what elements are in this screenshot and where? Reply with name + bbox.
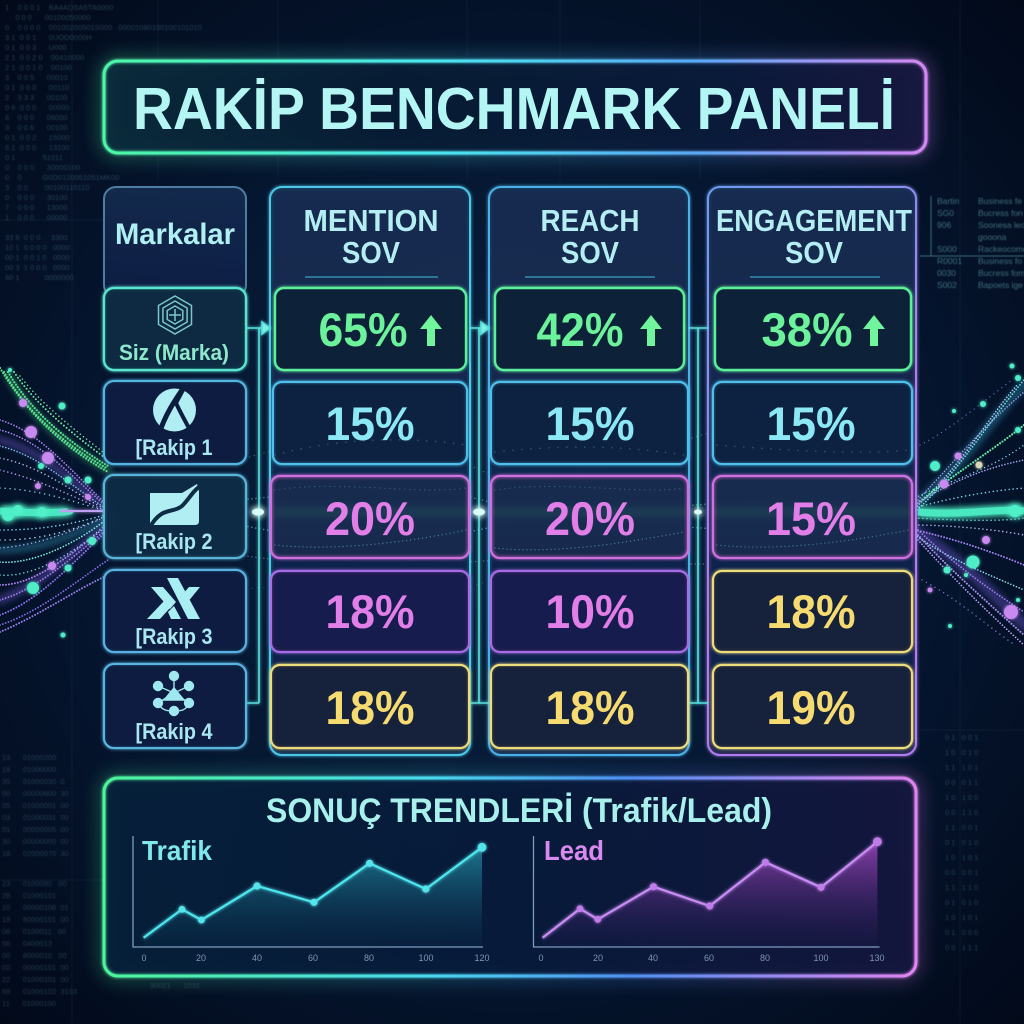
binary data: bottom right: 1 0 1 0 1 <box>945 913 978 922</box>
binary data: top left: 0 0 0 0 30000100 <box>5 163 80 172</box>
cell: engagement rakip 1 <box>713 382 912 464</box>
chart: lead: 20 <box>593 953 603 963</box>
binary data: top left: 0 0 G0D0120051051MK00 <box>5 173 119 182</box>
heading: engagement <box>716 203 912 270</box>
arrow up <box>863 315 885 346</box>
row 3 particle band <box>271 507 912 517</box>
binary data: bottom left: 19 80000101 00 <box>2 915 69 924</box>
icon: network <box>154 672 194 716</box>
binary data: top left: 1 0 0 0 1 BA4ADSA5TA0000 <box>5 3 113 12</box>
binary data: bottom right <box>945 733 978 952</box>
binary data: top left: 0 0 0 0 30100 <box>5 193 68 202</box>
chart: lead: 40 <box>648 953 658 963</box>
binary data: bottom right: 0 0 0 0 1 <box>945 868 978 877</box>
chart: lead: 60 <box>704 953 714 963</box>
cell: mention siz 65%: 65% <box>318 303 408 356</box>
chart: lead: 100 <box>813 953 829 963</box>
cell: reach rakip 4 <box>491 665 688 748</box>
side legend text: R0001 <box>937 256 962 266</box>
binary data: bottom left <box>2 753 200 1008</box>
heading: reach: SOV <box>561 235 619 270</box>
binary data: top left: 33 8 0 0 0 3300 <box>5 233 68 242</box>
side legend text: Business fo <box>978 256 1022 266</box>
cell: engagement rakip 3: 18% <box>766 585 856 638</box>
brand row: rakip 2 <box>104 475 246 558</box>
binary data: top left: 7 0 0 0 13000 <box>5 203 68 212</box>
chart: trafik: 20 <box>196 953 206 963</box>
cell: engagement siz 38% <box>715 288 911 370</box>
binary data: top left: 1 0 0 0 00000 <box>5 213 68 222</box>
cell: reach siz 42% <box>495 288 684 370</box>
binary data: top left: 0 1 0 0 2 15000 <box>5 133 70 142</box>
chart: trafik: 100 <box>418 953 434 963</box>
binary data: bottom left: 10 00000106 01 <box>2 903 69 912</box>
side legend text: S002 <box>937 280 957 290</box>
side legend text: 906 <box>937 220 951 230</box>
cell: reach rakip 3 <box>491 571 688 652</box>
particles over table <box>275 440 908 550</box>
trends heading: SONUÇ TRENDLERİ (Trafik/Lead) <box>266 792 772 830</box>
heading: engagement: ENGAGEMENT <box>716 203 912 238</box>
binary data: bottom left: 69 01000102 3103 <box>2 987 77 996</box>
binary data: bottom right: 1 0 1 0 1 <box>945 853 978 862</box>
arrow up <box>420 315 442 346</box>
cell: engagement rakip 4: 19% <box>766 681 856 734</box>
side legend text: S000 <box>937 244 957 254</box>
chart: trafik: 80 <box>364 953 374 963</box>
cell: mention rakip 2: 20% <box>325 492 415 545</box>
binary data: top left <box>5 3 202 282</box>
panel: engagement column <box>708 187 916 755</box>
cell: engagement rakip 3 <box>713 571 912 652</box>
connector glow nodes <box>252 508 702 516</box>
binary data: bottom right: 0 1 0 0 1 <box>945 733 978 742</box>
binary data: bottom left: 56 0400013 <box>2 939 58 948</box>
chart: lead: 80 <box>760 953 770 963</box>
cell: reach rakip 3: 10% <box>546 585 634 638</box>
connector lines <box>246 322 708 703</box>
binary data: top left: 6 0 0 0 06000 <box>5 113 68 122</box>
icon: road circle <box>153 387 196 434</box>
cell: reach rakip 2: 20% <box>545 492 635 545</box>
binary data: top left: 0 0 0 0 0 00100200501S000 00001080100100101010 <box>5 23 202 32</box>
binary data: top left: 2 1 0 0 1 0 00100 <box>5 63 72 72</box>
side legend text: Bapoets ige <box>978 280 1023 290</box>
brand row: rakip 4: [Rakip 4 <box>136 719 213 744</box>
title text: RAKİP BENCHMARK PANELİ <box>133 76 895 142</box>
cell: mention siz 65% <box>275 288 466 370</box>
binary data: bottom left: 35 01000030 0 <box>2 777 65 786</box>
brand row: rakip 2: [Rakip 2 <box>136 529 212 554</box>
cell: engagement rakip 2 <box>713 476 912 558</box>
chart: trafik: 60 <box>308 953 318 963</box>
binary data: top left: 0 6 0 0 0 00000 <box>5 103 70 112</box>
binary data: bottom left: 30 00000050 00 <box>2 837 69 846</box>
binary data: top left: 10 1 0 0 0 0 0000 <box>5 243 70 252</box>
binary data: bottom left: 13 01000200 <box>2 753 60 762</box>
binary data: bottom right: 0 1 0 1 0 <box>945 898 978 907</box>
title panel <box>104 61 926 153</box>
cell: mention rakip 3: 18% <box>326 585 414 638</box>
side legend text: 0030 <box>937 268 956 278</box>
heading: reach <box>540 203 640 270</box>
binary data: top left: 60 1 0000000 <box>5 273 74 282</box>
binary data: top left: 3 0 0 5 00010 <box>5 73 68 82</box>
binary data: bottom right: 1 1 1 0 1 <box>945 763 978 772</box>
panel: reach column <box>489 187 689 755</box>
side legend text: Bucress fom <box>978 268 1024 278</box>
chart: lead <box>534 835 885 963</box>
cell: engagement siz 38%: 38% <box>762 303 852 356</box>
binary data: bottom left: 23 0100080 00 <box>2 879 67 888</box>
heading: mention: SOV <box>342 235 400 270</box>
brand row: siz marka <box>104 288 246 370</box>
binary data: bottom right: 1 0 0 1 0 <box>945 748 978 757</box>
cell: mention rakip 4 <box>271 665 469 748</box>
side legend text: SG0 <box>937 208 954 218</box>
cell: mention rakip 2 <box>271 476 469 558</box>
cell: mention rakip 1: 15% <box>326 397 414 450</box>
particle haze across the table <box>240 424 915 600</box>
cell: reach rakip 1 <box>491 382 688 464</box>
cell: mention rakip 1 <box>273 382 467 464</box>
brand header text: Markalar <box>115 218 235 251</box>
binary data: top left: 0 1 0 0 0 00110 <box>5 83 69 92</box>
binary data: bottom right: 0 1 0 1 0 <box>945 838 978 847</box>
binary data: bottom left: 26 01000101 <box>2 891 60 900</box>
glowing particles <box>0 364 1024 638</box>
binary data: bottom left: 06 0100011 00 <box>2 927 66 936</box>
chart: lead: 130 <box>869 953 885 963</box>
binary data: top left: 00 1 0 0 1 0 0000 <box>5 253 70 262</box>
binary data: bottom left: 22 01000101 00 <box>2 975 69 984</box>
binary data: bottom left: 30021 1031 <box>150 981 200 990</box>
cell: engagement rakip 2: 15% <box>766 492 856 545</box>
particle stream: right <box>915 380 1024 645</box>
cell: mention rakip 3 <box>271 571 469 652</box>
binary data: top left: 3 0 0 00100110110 <box>5 183 89 192</box>
panel: brand header <box>104 187 246 297</box>
binary data: top left: 2 3 3 3 00100 <box>5 93 68 102</box>
brand row: rakip 1 <box>104 381 246 464</box>
brand row: rakip 3 <box>104 570 246 652</box>
binary data: bottom right: 0 1 0 0 0 <box>945 928 978 937</box>
heading: reach: REACH <box>540 203 640 238</box>
binary data: bottom left: 02 00000101 00 <box>2 963 69 972</box>
binary data: top left: 6 1 0 0 0 13100 <box>5 143 70 152</box>
binary data: top left: 0 1 51011 <box>5 153 63 162</box>
side legend text: Business fe <box>978 196 1022 206</box>
binary data: bottom right: 0 0 1 1 1 <box>945 943 978 952</box>
panel: mention column <box>270 187 470 755</box>
chart: trafik: Trafik <box>142 835 212 866</box>
brand row: siz marka: Siz (Marka) <box>119 340 229 365</box>
binary data: bottom left: 18 02000070 30 <box>2 849 69 858</box>
side legend text: gooona <box>978 232 1007 242</box>
binary data: bottom right: 1 1 1 1 0 <box>945 883 978 892</box>
cell: reach rakip 4: 18% <box>546 681 634 734</box>
brand row: rakip 3: [Rakip 3 <box>136 624 212 649</box>
side legend text: Bucress fon <box>978 208 1023 218</box>
binary data: bottom left: 18 01000000 <box>2 765 60 774</box>
binary data: top left: 3 0 0 6 00100 <box>5 123 68 132</box>
chart: trafik: 0 <box>141 953 147 963</box>
icon: double chevron <box>147 578 200 619</box>
arrow up <box>640 315 662 346</box>
binary data: top left: 3 1 0 0 1 0UOD0000H <box>5 33 92 42</box>
binary data: bottom right: 1 0 1 0 0 <box>945 793 978 802</box>
binary data: bottom right: 0 0 0 1 1 <box>945 778 978 787</box>
heading: engagement: SOV <box>785 235 843 270</box>
icon: trend folder <box>150 484 199 527</box>
cell: reach rakip 2 <box>491 476 688 558</box>
panel: trends <box>104 778 916 976</box>
cell: engagement rakip 1: 15% <box>766 397 856 450</box>
icon: hexagon maze <box>158 296 192 334</box>
binary data: bottom right: 1 1 0 0 1 <box>945 823 978 832</box>
cell: reach rakip 1: 15% <box>546 397 634 450</box>
side legend text: Soonesa leo <box>978 220 1024 230</box>
cell: mention rakip 4: 18% <box>326 681 414 734</box>
heading: mention: MENTION <box>304 203 438 238</box>
binary data: bottom left: 00 8000010 00 <box>2 951 67 960</box>
chart: lead: Lead <box>544 835 604 866</box>
binary data: top left: 2 1 0 0 2 0 00410000 <box>5 53 84 62</box>
brand row: rakip 4 <box>104 664 246 748</box>
binary data: bottom left: 00 00000600 30 <box>2 789 69 798</box>
cell: engagement rakip 4 <box>713 665 912 748</box>
side legend text: Bartin <box>937 196 959 206</box>
chart: trafik: 120 <box>474 953 490 963</box>
binary data: bottom left: 11 01000100 <box>2 999 60 1008</box>
brand row: rakip 1: [Rakip 1 <box>136 435 212 460</box>
chart: trafik <box>133 835 490 963</box>
binary data: bottom right: 0 0 1 1 0 <box>945 808 978 817</box>
binary data: top left: 00 3 1 0 0 0 0000 <box>5 263 70 272</box>
binary data: bottom left: 05 01000001 00 <box>2 801 69 810</box>
side legend text <box>920 196 1024 290</box>
particle stream: left <box>0 368 108 632</box>
binary data: bottom left: 03 01000031 00 <box>2 813 69 822</box>
binary data: top left: 0 1 0 0 3 U000 <box>5 43 67 52</box>
cell: reach siz 42%: 42% <box>536 303 624 356</box>
binary data: bottom left: 01 00000005 00 <box>2 825 69 834</box>
chart: lead: 0 <box>538 953 544 963</box>
chart: trafik: 40 <box>252 953 262 963</box>
heading: mention <box>304 203 438 270</box>
binary data: top left: 0 0 0 00100050000 <box>5 13 90 22</box>
